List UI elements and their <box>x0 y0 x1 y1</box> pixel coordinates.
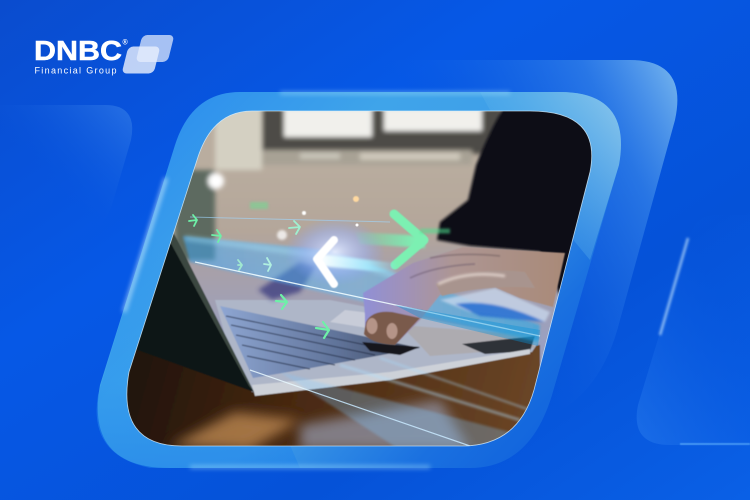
hand <box>363 247 565 345</box>
sleeve under hand <box>440 288 550 322</box>
laptop base <box>215 300 540 392</box>
logo tagline: Financial Group <box>34 66 116 76</box>
decorative panel: left <box>0 105 132 240</box>
decorative panel: right <box>637 215 750 445</box>
laptop screen back <box>136 242 254 392</box>
table <box>126 344 540 446</box>
icon: large green arrow right <box>355 214 450 265</box>
glass band line <box>195 262 540 346</box>
left hand <box>258 262 316 300</box>
photo: laptop and hand with arrows <box>110 105 610 450</box>
logo wordmark: DNBC <box>34 35 122 66</box>
icon: central glow <box>290 221 382 281</box>
light streaks <box>183 217 540 450</box>
logo <box>34 35 174 76</box>
icon: large white arrow left <box>317 240 395 284</box>
window background <box>175 108 502 260</box>
logo icon: overlapping cards <box>122 35 174 74</box>
icon: small green arrows <box>189 215 329 338</box>
light flares <box>250 196 359 240</box>
logo registered mark: ® <box>122 38 128 46</box>
panel: back card <box>340 60 677 420</box>
photo outline <box>127 111 592 446</box>
panel: image frame <box>97 92 621 468</box>
person silhouette <box>437 105 600 300</box>
